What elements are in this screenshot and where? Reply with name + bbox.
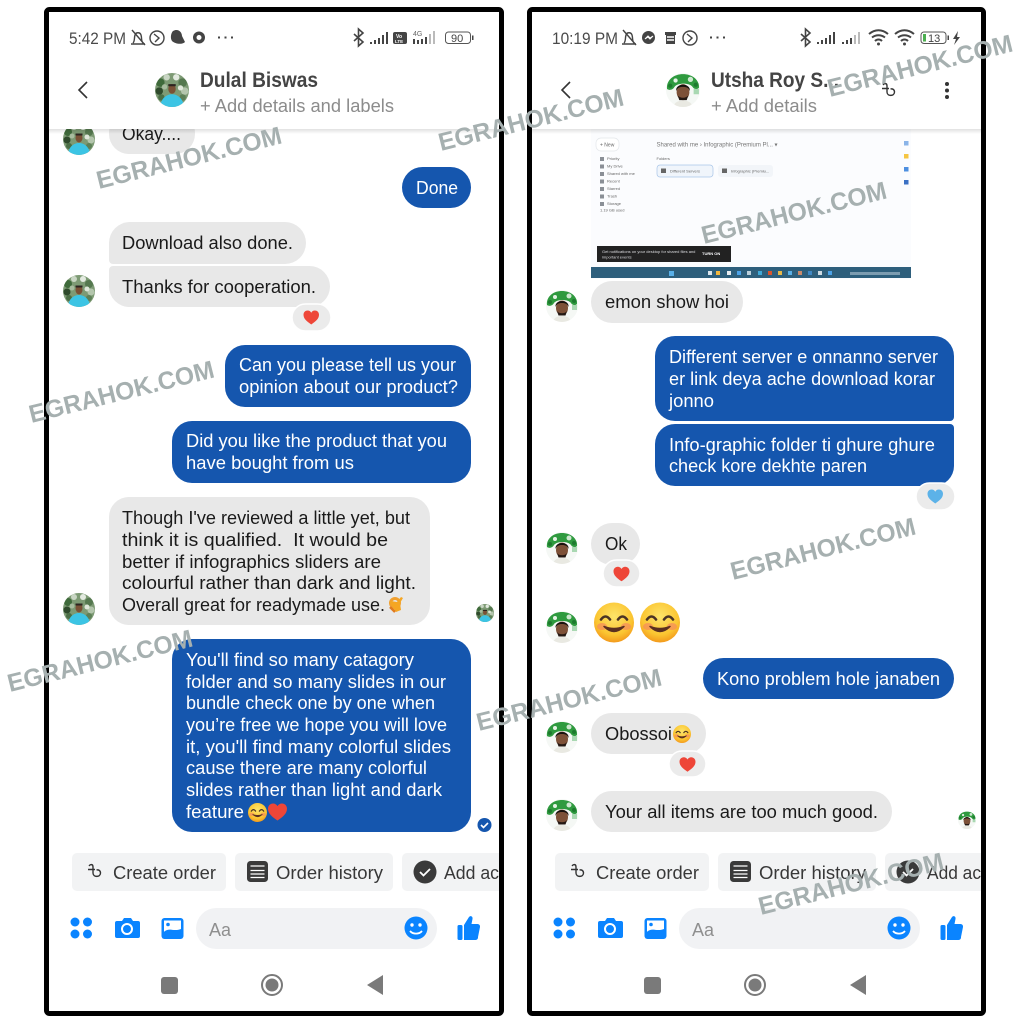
message: Kono problem — [703, 658, 954, 699]
status time: 10:19 PM — [552, 29, 618, 48]
drive sidebar items: Trash — [607, 194, 617, 198]
drive notification toast: Get notifications on your desktop for shared files and — [602, 249, 695, 254]
icon: smile emoji — [248, 803, 267, 822]
chip: order history — [718, 853, 876, 891]
watermarks: EGRAHOK.COM — [824, 30, 1016, 103]
drive sidebar items: Recent — [607, 178, 621, 184]
contact avatar — [546, 721, 578, 753]
watermarks: EGRAHOK.COM — [26, 356, 217, 429]
message: opinion question: opinion about our product? — [239, 377, 458, 397]
icon: emoji smile — [404, 916, 428, 940]
message: different server: er link deya ache download korar — [669, 369, 935, 389]
contact avatar — [63, 593, 95, 625]
left bottom bar — [70, 853, 499, 995]
drive notification toast — [597, 246, 731, 262]
status icons left — [622, 30, 725, 45]
message: reply about slides: you’re free we hope you will love — [186, 715, 447, 735]
status icons right: 90 — [451, 33, 463, 45]
windows taskbar — [591, 267, 911, 278]
message: Kono problem: Kono problem hole janaben — [717, 669, 940, 689]
drive sidebar items: 1.19 GB used — [600, 208, 624, 212]
nav: home — [745, 975, 765, 995]
watermarks: EGRAHOK.COM — [435, 84, 627, 157]
folder chip: different servers — [657, 165, 713, 177]
watermarks: EGRAHOK.COM — [698, 177, 890, 250]
status time: 5:42 PM — [69, 29, 126, 48]
message: different server: jonno — [668, 391, 714, 411]
folder chip: infographic — [718, 165, 773, 177]
message input — [196, 908, 437, 949]
icon: menu dots — [70, 918, 92, 938]
message: reply about slides: bundle check one by one when — [186, 693, 435, 713]
status icons right: Vo — [396, 34, 402, 40]
message: did you like the product: Did you like the product that you — [186, 431, 447, 451]
chip: add action clipped: Add ac — [927, 863, 981, 883]
status icons right: 13 — [928, 33, 940, 45]
drive sidebar items: Starred — [607, 186, 620, 191]
blue heart reaction — [916, 483, 955, 510]
icon: taka currency — [882, 84, 894, 95]
heart reaction — [603, 560, 640, 587]
right header — [532, 12, 981, 134]
status icons right — [801, 29, 960, 46]
drive breadcrumb: Shared with me › Infographic (Premium Pl... ▾ — [656, 142, 778, 148]
message: Obossoi — [591, 713, 706, 754]
message: Done: Done — [416, 178, 458, 198]
drive new button — [596, 138, 619, 151]
message: customer review: Overall great for readymade use. — [122, 595, 385, 615]
drive sidebar items: Shared with me — [607, 171, 636, 176]
message: reply about slides: folder and so many slides in our — [186, 672, 446, 692]
status icons right: LTE — [395, 39, 403, 44]
nav: recent — [161, 977, 178, 994]
folder chip: infographic: Infographic (Premiu... — [731, 168, 769, 174]
message: customer review: Though I've reviewed a little yet, but — [122, 508, 410, 528]
watermarks: EGRAHOK.COM — [4, 625, 196, 698]
contact avatar — [546, 611, 578, 643]
message: all items good: Your all items are too much good. — [605, 802, 878, 822]
icon: ok hand emoji — [390, 597, 403, 612]
chip: create order — [72, 853, 226, 891]
back arrow — [79, 82, 87, 98]
message: Download also done: Download also done. — [122, 233, 293, 253]
drive sidebar items: Storage — [607, 201, 622, 206]
message: customer review: colourful rather than dark and light. — [122, 573, 416, 593]
message: Ok: Ok — [605, 534, 628, 554]
nav: home — [262, 975, 282, 995]
message: Okay — [109, 113, 195, 154]
nav: back — [367, 975, 383, 995]
contact avatar — [155, 73, 189, 107]
drive notification toast: TURN ON — [702, 251, 720, 256]
contact avatar — [546, 290, 578, 322]
icon: camera — [115, 918, 140, 938]
message: reply about slides — [172, 639, 471, 832]
message input — [679, 908, 920, 949]
message: reply about slides: You'll find so many catagory — [186, 650, 414, 670]
chip: order history — [235, 853, 393, 891]
back arrow — [562, 82, 570, 98]
nav: recent — [644, 977, 661, 994]
message: different server — [655, 336, 954, 421]
message: opinion question: Can you please tell us your — [239, 355, 456, 375]
seen avatar small — [476, 604, 494, 622]
message: did you like the product — [172, 421, 471, 483]
message: emon show hoi — [591, 281, 743, 323]
icon: emoji smile — [888, 916, 910, 940]
message: Ok — [591, 523, 640, 565]
chip: order history: Order history — [276, 863, 383, 883]
contact avatar — [666, 73, 700, 107]
message: customer review: better if infographics sliders are — [122, 552, 381, 572]
message: Okay: Okay.... — [122, 124, 181, 144]
heart reaction — [292, 304, 331, 331]
message: reply about slides: feature — [186, 802, 244, 822]
message: emon show hoi: emon show hoi — [605, 292, 729, 312]
drive notification toast: important events — [602, 254, 632, 260]
phone frame: left screenshot — [46, 10, 502, 1014]
smile emoji pair — [594, 602, 680, 642]
message: Thanks for cooperation: Thanks for cooperation. — [122, 277, 316, 297]
contact avatar — [546, 799, 578, 831]
shared drive screenshot — [591, 125, 911, 279]
left header — [49, 12, 499, 134]
icon: delivered check — [478, 818, 492, 832]
chip: add action clipped — [885, 853, 981, 891]
chip: order history: Order history — [759, 863, 866, 883]
nav: back — [850, 975, 866, 995]
chip: add action clipped: Add ac — [444, 863, 499, 883]
chip: add action clipped — [402, 853, 499, 891]
watermarks: EGRAHOK.COM — [473, 664, 665, 737]
drive new button: + New — [600, 142, 615, 148]
status icons right — [354, 29, 474, 46]
watermarks: EGRAHOK.COM — [727, 513, 919, 586]
message: Done — [402, 167, 471, 208]
icon: heart emoji — [268, 803, 287, 821]
contact avatar — [63, 275, 95, 307]
watermarks: EGRAHOK.COM — [93, 122, 285, 195]
contact subtitle: + Add details — [711, 96, 817, 116]
message: reply about slides: it, you'll find many colorful slides — [186, 737, 451, 757]
contact name: Utsha Roy S... — [711, 69, 839, 92]
contact avatar, top message — [63, 123, 95, 155]
panel: left chat messages — [63, 113, 494, 832]
message: all items good — [591, 791, 892, 832]
icon: thumbs up — [940, 916, 963, 940]
message: customer review — [109, 497, 430, 625]
drive sidebar items: Priority — [607, 156, 619, 161]
message: info-graphic folder — [655, 424, 954, 486]
status icons left — [131, 30, 233, 45]
drive side rail icons — [904, 141, 908, 184]
message: info-graphic folder: Info-graphic folder ti ghure ghure — [669, 435, 935, 455]
message input: Aa — [209, 920, 232, 940]
chip: create order: Create order — [596, 863, 699, 883]
icon: image — [162, 918, 184, 939]
right bottom bar — [554, 853, 981, 995]
message: opinion question — [225, 345, 471, 407]
heart reaction — [669, 751, 706, 777]
message: reply about slides: cause there are many colorful — [186, 758, 427, 778]
icon: thumbs up — [458, 916, 480, 940]
watermarks: EGRAHOK.COM — [755, 848, 947, 921]
message: customer review: think it is qualified. It would be — [122, 530, 388, 550]
chip: create order: Create order — [113, 863, 216, 883]
message: info-graphic folder: check kore dekhte paren — [669, 456, 867, 476]
message: Obossoi: Obossoi — [605, 724, 672, 744]
status icons right: 4G — [413, 31, 422, 38]
drive folders label: Folders — [656, 156, 670, 161]
panel: right chat messages — [546, 125, 976, 832]
folder chip: different servers: Different Servers — [670, 168, 700, 174]
chip: create order — [555, 853, 709, 891]
icon: more menu — [945, 82, 949, 99]
drive sidebar items: My Drive — [607, 164, 624, 168]
contact name: Dulal Biswas — [200, 69, 318, 92]
message: Thanks for cooperation — [109, 266, 330, 307]
message: different server: Different server e onnanno server — [669, 347, 938, 367]
icon: menu dots — [554, 918, 575, 938]
seen avatar small — [958, 811, 976, 829]
contact avatar — [546, 532, 578, 564]
icon: image — [644, 918, 666, 939]
message: reply about slides: slides rather than light and dark — [186, 780, 443, 800]
contact subtitle: + Add details and labels — [200, 96, 394, 116]
icon: camera — [598, 918, 623, 938]
message input: Aa — [692, 920, 715, 940]
drive sidebar items — [600, 156, 636, 212]
phone frame: right screenshot — [530, 10, 984, 1014]
message: did you like the product: have bought from us — [186, 453, 354, 473]
message: Download also done — [109, 222, 306, 264]
